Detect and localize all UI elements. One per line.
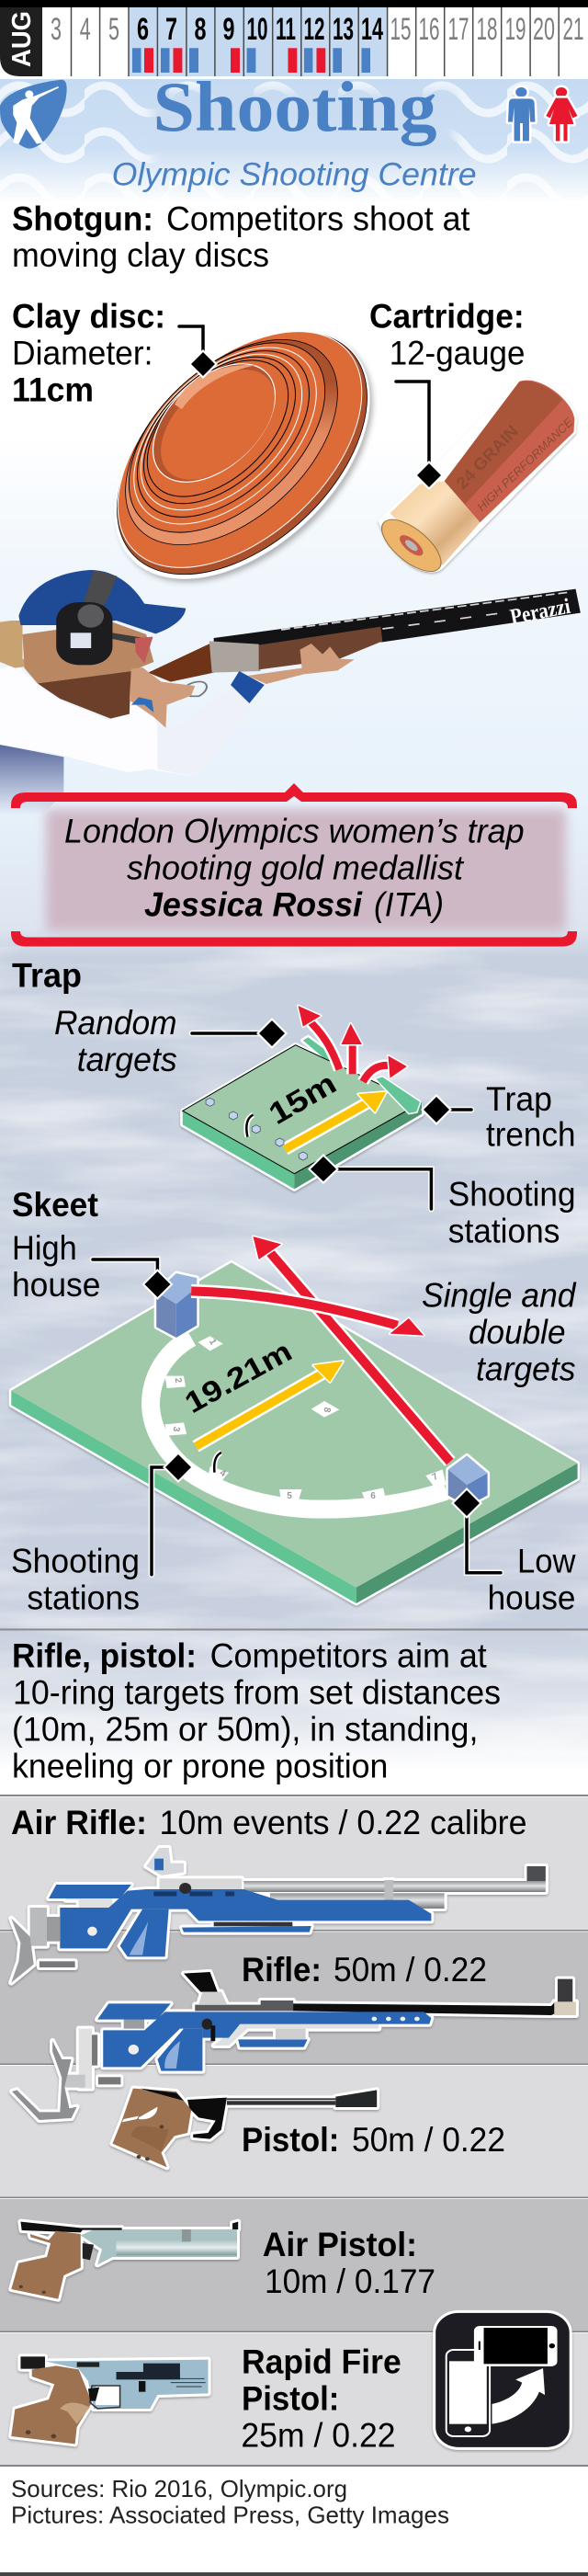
label: single and double targets: targets (476, 1351, 575, 1388)
rifle pistol intro text (12, 1636, 501, 1784)
date strip: 13 (333, 12, 354, 47)
panel: pistol (0, 2065, 588, 2198)
distance label 19.21m: 19.21m (179, 1334, 297, 1419)
label: low house: house (488, 1579, 575, 1617)
icon: rotate phone (435, 2311, 571, 2448)
air pistol text: Air Pistol: (263, 2226, 417, 2263)
date strip: 9 (222, 12, 235, 47)
station numbers: 5 (287, 1491, 292, 1501)
date strip: 11 (276, 12, 296, 47)
pistol text: 50m / 0.22 (352, 2121, 505, 2159)
yellow arrow (285, 1101, 369, 1149)
trap range diagram (183, 1006, 422, 1189)
cartridge illustration (372, 381, 574, 579)
sources: Sources: Rio 2016, Olympic.org (11, 2475, 347, 2502)
bottom rule (0, 2572, 588, 2576)
date strip: 5 (108, 12, 119, 47)
clay disc label: Diameter: (12, 335, 153, 372)
date strip: 4 (80, 12, 91, 47)
cartridge markings: 24 GRAIN (452, 422, 522, 493)
clay disc illustration (68, 284, 416, 626)
title: Shooting (153, 67, 437, 146)
label: random targets: Random (54, 1004, 177, 1042)
yellow arrow (196, 1372, 326, 1446)
pistol text (242, 2121, 505, 2159)
cartridge label: Cartridge: (369, 298, 525, 336)
label: low house (451, 1487, 576, 1617)
station numbers: 4 (218, 1468, 228, 1479)
label: random targets: targets (77, 1041, 177, 1078)
air pistol text (263, 2226, 435, 2300)
shotgun intro text: moving clay discs (12, 236, 269, 274)
high house (156, 1273, 197, 1338)
label: high house (12, 1229, 173, 1304)
label: trap shooting stations: Shooting (448, 1176, 575, 1214)
rapid fire pistol text: 25m / 0.22 (241, 2417, 396, 2455)
label: trap shooting stations: stations (448, 1213, 560, 1250)
date strip: 8 (195, 12, 206, 47)
distance label 15m: 15m (263, 1066, 342, 1131)
date strip: 18 (476, 12, 498, 47)
panel: air pistol (0, 2198, 588, 2332)
station numbers: 7 (431, 1471, 440, 1483)
air pistol text: 10m / 0.177 (265, 2263, 435, 2300)
rapid fire pistol text: Rapid Fire (242, 2343, 401, 2381)
illustration: air pistol (11, 2222, 238, 2299)
rapid fire pistol text: Pistol: (242, 2380, 339, 2418)
label: trap shooting stations (308, 1154, 575, 1250)
leader: cartridge (396, 382, 444, 490)
leader: clay disc (179, 326, 218, 379)
date strip: 12 (303, 12, 325, 47)
date strip: 20 (533, 12, 555, 47)
Perazzi label: Perazzi (508, 595, 572, 630)
callout text (64, 813, 525, 924)
venue subtitle: Olympic Shooting Centre (112, 157, 477, 193)
clay disc label (12, 298, 165, 409)
rifle pistol intro text: Competitors aim at (210, 1636, 487, 1674)
icon: shooting pictogram (0, 80, 67, 149)
heading: Skeet: Skeet (12, 1186, 98, 1224)
pistol text: Pistol: (242, 2121, 339, 2159)
label: high house: High (12, 1229, 77, 1267)
rifle pistol intro text: (10m, 25m or 50m), in standing, (12, 1710, 478, 1748)
stations (206, 1098, 307, 1160)
date strip: 15 (390, 12, 412, 47)
rifle text: Rifle: (242, 1951, 322, 1989)
label: single and double targets: Single and (422, 1277, 577, 1315)
label: trap trench: trench (486, 1116, 575, 1154)
clay disc label: 11cm (12, 371, 94, 409)
date strip: 10 (246, 12, 268, 47)
rifle pistol intro text: kneeling or prone position (12, 1747, 388, 1784)
rapid fire pistol text (241, 2343, 401, 2455)
callout: red bracket bottom (11, 931, 577, 947)
label: skeet shooting stations (11, 1452, 194, 1617)
low house (448, 1455, 488, 1506)
date strip: 6 (137, 12, 149, 47)
sources: Pictures: Associated Press, Getty Images (11, 2501, 449, 2528)
callout text: shooting gold medallist (127, 849, 465, 887)
rifle text: 50m / 0.22 (334, 1951, 487, 1989)
station numbers: 3 (170, 1426, 181, 1433)
rifle pistol intro text: 10-ring targets from set distances (13, 1673, 501, 1711)
panel: rapid fire pistol (0, 2332, 588, 2466)
clay disc label: Clay disc: (12, 298, 165, 336)
date strip: AUG (7, 11, 37, 67)
cartridge markings: HIGH PERFORMANCE (474, 415, 576, 514)
shotgun intro text: Shotgun: (12, 200, 153, 238)
air rifle text: Air Rifle: (11, 1804, 147, 1841)
date strip: 14 (361, 12, 383, 47)
date strip: 7 (165, 12, 177, 47)
shotgun intro text (12, 200, 470, 274)
air rifle text: 10m events / 0.22 calibre (160, 1804, 527, 1841)
skeet range diagram (11, 1237, 578, 1603)
station numbers: 6 (370, 1491, 376, 1501)
date strip: 17 (448, 12, 469, 47)
divider (0, 1629, 588, 1631)
air rifle text (11, 1804, 527, 1841)
photo: Jessica Rossi aiming shotgun (0, 570, 581, 815)
sky photo texture (0, 947, 588, 1756)
callout: red bracket top (11, 783, 577, 808)
illustration: air rifle (11, 1848, 546, 1983)
illustration: rifle (12, 1972, 576, 2120)
shooting track (151, 1338, 447, 1510)
panel: air rifle (0, 1795, 588, 1932)
label: skeet shooting stations: stations (27, 1579, 140, 1617)
callout text: Jessica Rossi (144, 886, 363, 924)
red arrows (268, 1250, 450, 1462)
station numbers: 1 (207, 1338, 219, 1347)
date strip (0, 0, 588, 76)
panel: rifle (0, 1931, 588, 2065)
callout text: London Olympics women’s trap (64, 813, 525, 850)
label: trap trench: Trap (486, 1080, 552, 1118)
panel separators (0, 1795, 588, 2467)
cartridge label (369, 298, 525, 372)
heading: Trap: Trap (12, 956, 82, 994)
station numbers: 2 (173, 1377, 183, 1385)
label: low house: Low (517, 1543, 576, 1580)
station numbers (170, 1338, 440, 1501)
cartridge label: 12-gauge (390, 335, 525, 372)
lower body fading (0, 745, 63, 815)
icon: men and women (508, 87, 578, 141)
shotgun intro text: Competitors shoot at (166, 200, 470, 238)
label: trap trench (421, 1080, 575, 1154)
label: random targets (54, 1004, 288, 1078)
label: single and double targets (422, 1277, 577, 1388)
date strip: 16 (419, 12, 439, 47)
sources (11, 2475, 449, 2528)
illustration: pistol (112, 2089, 377, 2167)
date strip: 3 (51, 12, 62, 47)
station numbers: 8 (321, 1407, 332, 1414)
label: skeet shooting stations: Shooting (11, 1543, 140, 1580)
callout text: (ITA) (374, 886, 444, 924)
red target arrows (306, 1018, 394, 1082)
date strip: 19 (505, 12, 526, 47)
rifle pistol intro text: Rifle, pistol: (12, 1636, 197, 1674)
illustration: rapid fire pistol (11, 2356, 209, 2444)
rifle text (242, 1951, 487, 1989)
header band (0, 79, 588, 204)
label: high house: house (12, 1266, 100, 1304)
label: single and double targets: double (469, 1314, 566, 1351)
callout: background tint (46, 809, 566, 931)
